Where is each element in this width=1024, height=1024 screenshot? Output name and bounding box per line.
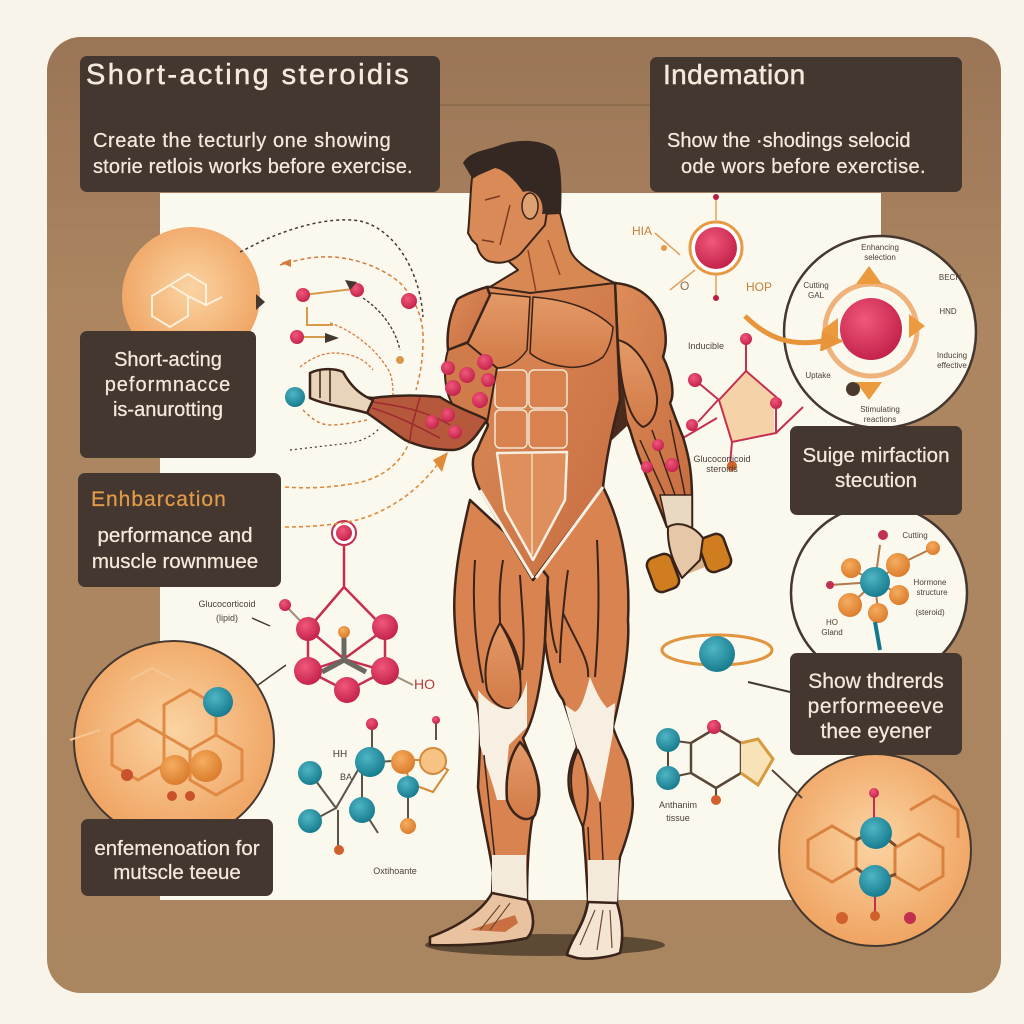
label: short-acting performance	[80, 331, 256, 458]
mid right circle molecule: HO	[826, 618, 838, 627]
label: short-acting performance: peformnacce	[105, 374, 231, 396]
ear	[522, 193, 538, 219]
heading left: Short-acting steroidis	[86, 59, 411, 91]
label: enhancement: Enhbarcation	[91, 488, 227, 511]
description left: Create the tecturly one showing	[93, 130, 391, 152]
middle right pentagon molecule: Glucocorticoid	[693, 454, 751, 464]
abdominal muscles	[495, 370, 567, 448]
mid right circle molecule: structure	[916, 588, 948, 597]
lower right hex molecule: Anthanim	[659, 800, 697, 810]
mid right circle molecule: Hormone	[914, 578, 947, 587]
pectoral left	[467, 293, 530, 368]
pectoral right	[530, 297, 613, 367]
description left	[93, 130, 413, 178]
upper right circle: reactive cell diagram: effective	[937, 361, 967, 370]
label: show thirds performance: Show thdrerds	[808, 670, 944, 693]
mid right circle molecule: (steroid)	[915, 608, 945, 617]
mid right circle molecule: Gland	[821, 628, 843, 637]
lower left orange molecule circle	[70, 641, 274, 841]
mid right circle molecule: Cutting	[902, 531, 928, 540]
muscular figure	[310, 141, 733, 959]
title panel left	[80, 56, 440, 192]
small red molecule top centre right: O	[680, 279, 689, 293]
upper arm	[445, 343, 497, 423]
label: inflammation for muscle tissue	[81, 819, 273, 896]
large red hexagon molecule: HO	[414, 676, 435, 692]
upper right circle: reactive cell diagram	[745, 236, 976, 428]
fist	[310, 369, 373, 413]
dashed arcs and small molecules around the fist	[240, 220, 448, 527]
rectus femoris	[485, 623, 521, 709]
lower right orange molecule circle	[779, 754, 971, 946]
thigh muscle divisions	[474, 540, 598, 683]
small red molecule top centre right: HOP	[746, 280, 772, 294]
forearm	[343, 395, 487, 450]
wrist tendons	[660, 495, 692, 530]
face	[468, 160, 550, 263]
lower centre mixed molecule: Oxtihoante	[373, 866, 417, 876]
lower centre mixed molecule: BA	[340, 772, 352, 782]
upper right circle: reactive cell diagram: Stimulating	[860, 405, 900, 414]
description left: storie retlois works before exercise.	[93, 156, 413, 178]
description right	[667, 130, 926, 178]
label: enhancement	[78, 473, 281, 587]
label: enhancement: muscle rownmuee	[92, 550, 258, 573]
right ankle	[588, 860, 619, 905]
lower centre mixed molecule: HH	[333, 749, 347, 760]
inner cream panel	[160, 193, 881, 900]
upper left orange circle with molecule	[122, 227, 265, 365]
label: inflammation for muscle tissue: mutscle teeue	[113, 861, 241, 884]
left foot	[430, 893, 533, 945]
description right: Show the ·shodings selocid	[667, 130, 910, 152]
label: enhancement: performance and	[98, 524, 252, 547]
description right: ode wors before exerctise.	[681, 156, 926, 178]
right knee tendon	[565, 677, 615, 802]
lower abdomen	[497, 452, 567, 560]
label: short-acting performance: is-anurotting	[113, 399, 223, 421]
left leg	[430, 500, 548, 945]
dumbbell	[645, 532, 733, 594]
upper right circle: reactive cell diagram: selection	[864, 253, 896, 262]
shin lines	[484, 755, 603, 870]
mid right circle molecule	[791, 505, 967, 681]
small red molecule top centre right: HIA	[632, 224, 652, 238]
large red hexagon molecule: Glucocorticoid	[198, 599, 256, 609]
ring orbit molecule	[662, 635, 790, 692]
lower centre mixed molecule	[298, 716, 448, 876]
large red hexagon molecule: (lipid)	[216, 613, 238, 623]
label: show thirds performance: thee eyener	[821, 720, 931, 743]
middle right pentagon molecule: steroids	[706, 464, 738, 474]
upper right circle: reactive cell diagram: Cutting	[803, 281, 829, 290]
small red molecule top centre right	[632, 194, 772, 301]
upper right circle: reactive cell diagram: Enhancing	[861, 243, 899, 252]
heading right: Indemation	[663, 59, 806, 90]
right foot	[567, 902, 622, 959]
large red hexagon molecule	[198, 521, 435, 703]
bicep	[618, 340, 657, 427]
middle right pentagon molecule: Inducible	[688, 341, 724, 351]
title panel right	[650, 57, 962, 192]
red inflammation dots	[425, 354, 679, 473]
middle right pentagon molecule	[683, 333, 803, 474]
hand	[668, 524, 703, 578]
label: short-acting performance: Short-acting	[114, 349, 222, 371]
arm shadow	[603, 345, 628, 440]
torso	[470, 283, 620, 580]
left calf	[507, 742, 539, 819]
lower right hex molecule: tissue	[666, 813, 690, 823]
label: surge inflammation: Suige mirfaction	[802, 444, 949, 467]
upper right circle: reactive cell diagram: Uptake	[805, 371, 831, 380]
label: show thirds performance	[790, 653, 962, 755]
upper right circle: reactive cell diagram: BECH	[939, 273, 961, 282]
label: surge inflammation: stecution	[835, 469, 917, 492]
neck and traps	[490, 213, 615, 293]
label: show thirds performance: performeeeve	[808, 695, 944, 718]
figure's left arm	[615, 283, 692, 530]
right leg	[535, 487, 633, 959]
label: surge inflammation	[790, 426, 962, 515]
upper right circle: reactive cell diagram: Inducing	[937, 351, 967, 360]
left knee tendon	[478, 680, 527, 800]
left ankle	[492, 855, 527, 905]
upper right circle: reactive cell diagram: GAL	[808, 291, 825, 300]
right calf inner	[571, 750, 588, 827]
floor shadow	[425, 934, 665, 956]
lower right hex molecule	[656, 720, 802, 823]
label: inflammation for muscle tissue: enfemenoation for	[94, 837, 260, 860]
hair	[463, 141, 561, 214]
figure's right deltoid	[448, 287, 490, 350]
hip lines	[480, 487, 603, 578]
upper right circle: reactive cell diagram: HND	[939, 307, 957, 316]
upper right circle: reactive cell diagram: reactions	[864, 415, 896, 424]
